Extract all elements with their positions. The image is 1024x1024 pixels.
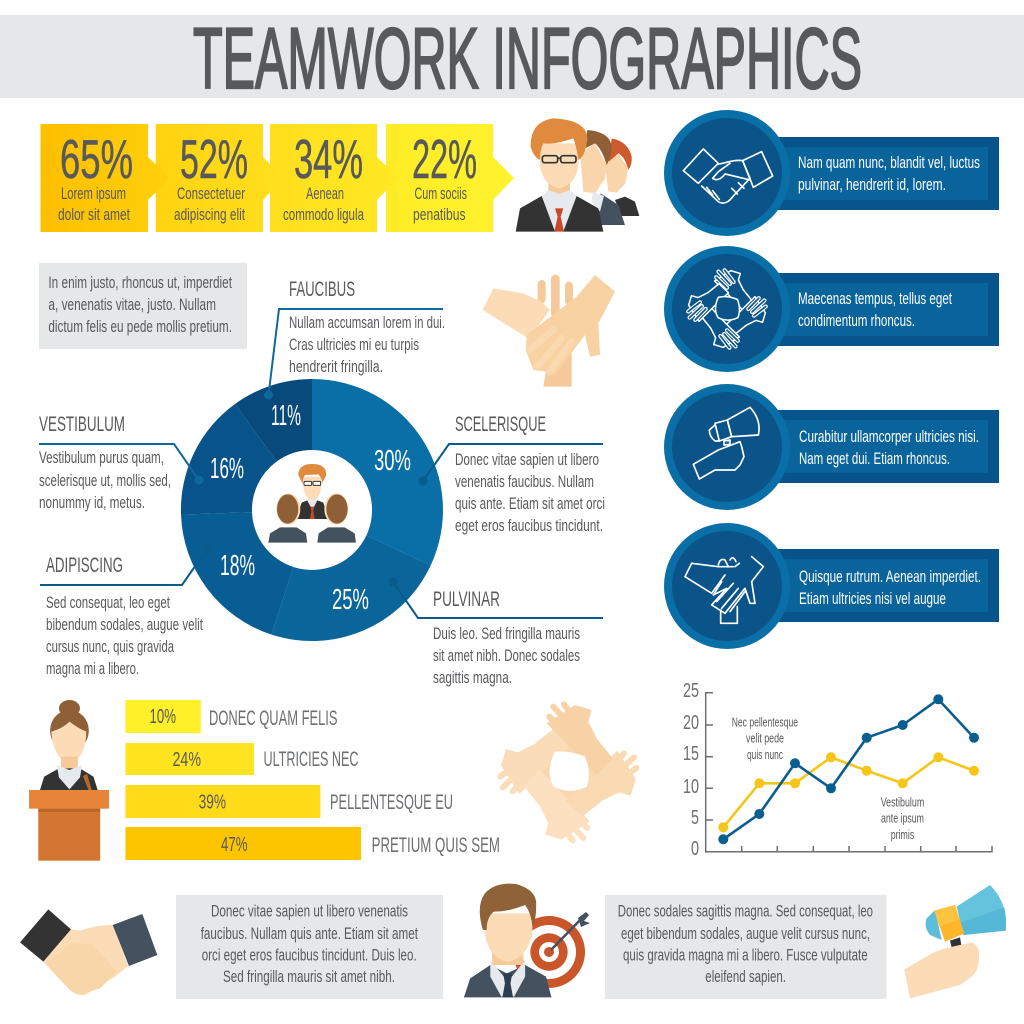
panel: team hands banner: condimentum rhoncus. <box>798 312 915 330</box>
axis labels: 15 <box>683 743 699 765</box>
axis labels: 0 <box>691 838 699 860</box>
segment 18% <box>181 512 293 635</box>
panel: stacked hands banner: Etiam ultricies nisi vel augue <box>799 590 946 608</box>
chart note: blue series: velit pede <box>746 731 784 746</box>
axis labels <box>683 680 699 860</box>
axis labels: 25 <box>683 680 699 702</box>
text block: bottom right <box>605 895 887 999</box>
callout: Scelerisque <box>418 413 605 535</box>
bar 47% <box>125 827 500 860</box>
callout: Vestibulum: Vestibulum purus quam, <box>39 449 164 467</box>
bar 10%: DONEC QUAM FELIS <box>209 707 338 730</box>
bar 10% <box>125 700 338 733</box>
callout: Scelerisque: venenatis faucibus. Nullam <box>455 473 594 491</box>
segment 30% <box>312 379 443 565</box>
yellow series <box>718 752 979 832</box>
text block: bottom right: eleifend sapien. <box>705 968 786 986</box>
callout: Vestibulum <box>39 413 204 512</box>
box 52%: Consectetuer <box>177 185 245 203</box>
text block: bottom left: Donec vitae sapien ut libero venenatis <box>211 903 408 921</box>
callout: Vestibulum: nonummy id, metus. <box>39 494 145 512</box>
callout: Scelerisque: SCELERISQUE <box>455 413 546 436</box>
bar 39% <box>125 785 453 818</box>
box 22%: penatibus <box>413 206 466 224</box>
text block: intro grey box <box>39 263 247 349</box>
box 65%: 65% <box>60 128 133 190</box>
chart note: blue series: Nec pellentesque <box>732 715 798 730</box>
axes <box>706 693 992 852</box>
bar chart <box>125 700 500 860</box>
callout: Faucibus <box>264 278 445 400</box>
segment 11% <box>235 379 312 462</box>
panel: team hands banner <box>664 246 999 372</box>
icon: stacked hands <box>483 275 615 387</box>
icon: target <box>513 912 590 988</box>
percent labels <box>210 400 411 616</box>
text block: intro grey box: a, venenatis vitae, justo. Nullam <box>48 296 216 314</box>
panel: handshake banner: pulvinar, hendrerit id, lorem. <box>798 176 946 194</box>
segment 16% <box>181 404 277 515</box>
panel: team hands banner: Maecenas tempus, tellus eget <box>798 290 952 308</box>
percent labels: 25% <box>332 584 369 616</box>
callout: Adipiscing: cursus nunc, quis gravida <box>46 638 175 656</box>
icon: businessman <box>464 884 551 997</box>
panel: stacked hands banner <box>664 523 999 649</box>
icon: hand with megaphone <box>904 885 1006 998</box>
icon: team in donut centre <box>268 464 356 543</box>
panel: percentage arrow boxes <box>40 124 514 232</box>
callout: Vestibulum: VESTIBULUM <box>39 413 125 436</box>
icon: stacked hands outline <box>685 557 763 623</box>
bar 39%: PELLENTESQUE EU <box>330 791 453 814</box>
callout: Pulvinar: PULVINAR <box>433 588 500 611</box>
text block: bottom left: Sed fringilla mauris sit amet nibh. <box>223 968 395 986</box>
icon: speaker at podium <box>29 700 109 861</box>
box 34%: commodo ligula <box>283 206 365 224</box>
bar 24%: 24% <box>172 749 201 771</box>
text block: bottom left: orci eget eros faucibus tincidunt. Duis leo. <box>202 947 417 965</box>
text block: bottom right: eget bibendum sodales, augue velit cursus nunc, <box>621 925 870 943</box>
callout: Pulvinar: sagittis magna. <box>433 669 512 687</box>
callout: Scelerisque: eget eros faucibus tincidunt. <box>455 517 603 535</box>
bar 39%: 39% <box>199 792 226 814</box>
box 34% <box>270 124 398 232</box>
box 22% <box>386 124 514 232</box>
text block: intro grey box: In enim justo, rhoncus ut, imperdiet <box>48 274 232 292</box>
icon: megaphone outline <box>693 407 759 479</box>
line chart <box>683 680 992 860</box>
callout: Adipiscing: magna mi a libero. <box>46 660 139 678</box>
axis labels: 10 <box>683 776 699 798</box>
percent labels: 30% <box>374 445 411 477</box>
callout: Pulvinar: sit amet nibh. Donec sodales <box>433 647 580 665</box>
box 52%: 52% <box>180 128 248 190</box>
axis labels: 20 <box>683 712 699 734</box>
chart note: blue series <box>732 715 798 762</box>
chart note: yellow series <box>881 795 924 842</box>
box 52%: adipiscing elit <box>174 206 245 224</box>
bar 10%: 10% <box>150 706 176 728</box>
bar 47%: PRETIUM QUIS SEM <box>372 834 500 857</box>
callout: Adipiscing <box>40 544 212 678</box>
box 34%: 34% <box>294 128 363 190</box>
callout: Faucibus: Nullam accumsan lorem in dui. <box>289 314 445 332</box>
donut chart <box>181 379 443 641</box>
icon: four hands pinwheel <box>500 704 636 840</box>
percent labels: 18% <box>220 550 255 582</box>
callout: Adipiscing: Sed consequat, leo eget <box>46 594 170 612</box>
chart note: yellow series: primis <box>891 827 915 842</box>
bar 24%: ULTRICIES NEC <box>264 748 358 771</box>
callout: Faucibus: hendrerit fringilla. <box>289 358 383 376</box>
callout: Scelerisque: Donec vitae sapien ut libero <box>455 451 599 469</box>
bar 24% <box>125 743 359 775</box>
percent labels: 16% <box>210 453 244 485</box>
text block: bottom right: Donec sodales sagittis magna. Sed consequat, leo <box>618 903 873 921</box>
text block: bottom left <box>176 895 443 999</box>
callout: Adipiscing: ADIPISCING <box>46 554 123 577</box>
callout: Pulvinar: Duis leo. Sed fringilla mauris <box>433 625 580 643</box>
icon: handshake outline <box>683 149 773 203</box>
panel: handshake banner <box>664 110 999 236</box>
box 52% <box>156 124 283 232</box>
callout: Faucibus: FAUCIBUS <box>289 278 355 301</box>
text block: intro grey box: dictum felis eu pede mollis pretium. <box>48 318 232 336</box>
box 65%: Lorem ipsum <box>61 185 126 203</box>
text block: bottom right: quis gravida magna mi a libero. Fusce vulputate <box>623 947 868 965</box>
chart note: blue series: quis nunc <box>747 747 783 762</box>
callout: Pulvinar <box>388 578 603 687</box>
callout: Scelerisque: quis ante. Etiam sit amet orci <box>455 495 605 513</box>
panel: megaphone banner: Nam eget dui. Etiam rhoncus. <box>799 450 950 468</box>
panel: megaphone banner <box>664 384 999 510</box>
callout: Adipiscing: bibendum sodales, augue velit <box>46 616 203 634</box>
chart note: yellow series: Vestibulum <box>881 795 924 810</box>
icon: handshake flat <box>20 909 157 995</box>
box 65%: dolor sit amet <box>58 206 130 224</box>
chart note: yellow series: ante ipsum <box>881 811 924 826</box>
bar 47%: 47% <box>221 834 248 856</box>
icon: three business people <box>516 118 639 232</box>
callout: Vestibulum: scelerisque ut, mollis sed, <box>39 472 171 490</box>
blue series <box>718 694 979 844</box>
percent labels: 11% <box>271 400 301 432</box>
text block: bottom left: faucibus. Nullam quis ante. Etiam sit amet <box>201 925 418 943</box>
axis labels: 5 <box>691 807 699 829</box>
callout: Faucibus: Cras ultricies mi eu turpis <box>289 336 419 354</box>
box 65% <box>40 124 170 232</box>
icon: four hands outline <box>688 270 766 348</box>
segment 25% <box>272 535 431 641</box>
box 22%: 22% <box>412 128 477 190</box>
box 34%: Aenean <box>306 185 344 203</box>
box 22%: Cum sociis <box>414 185 467 203</box>
